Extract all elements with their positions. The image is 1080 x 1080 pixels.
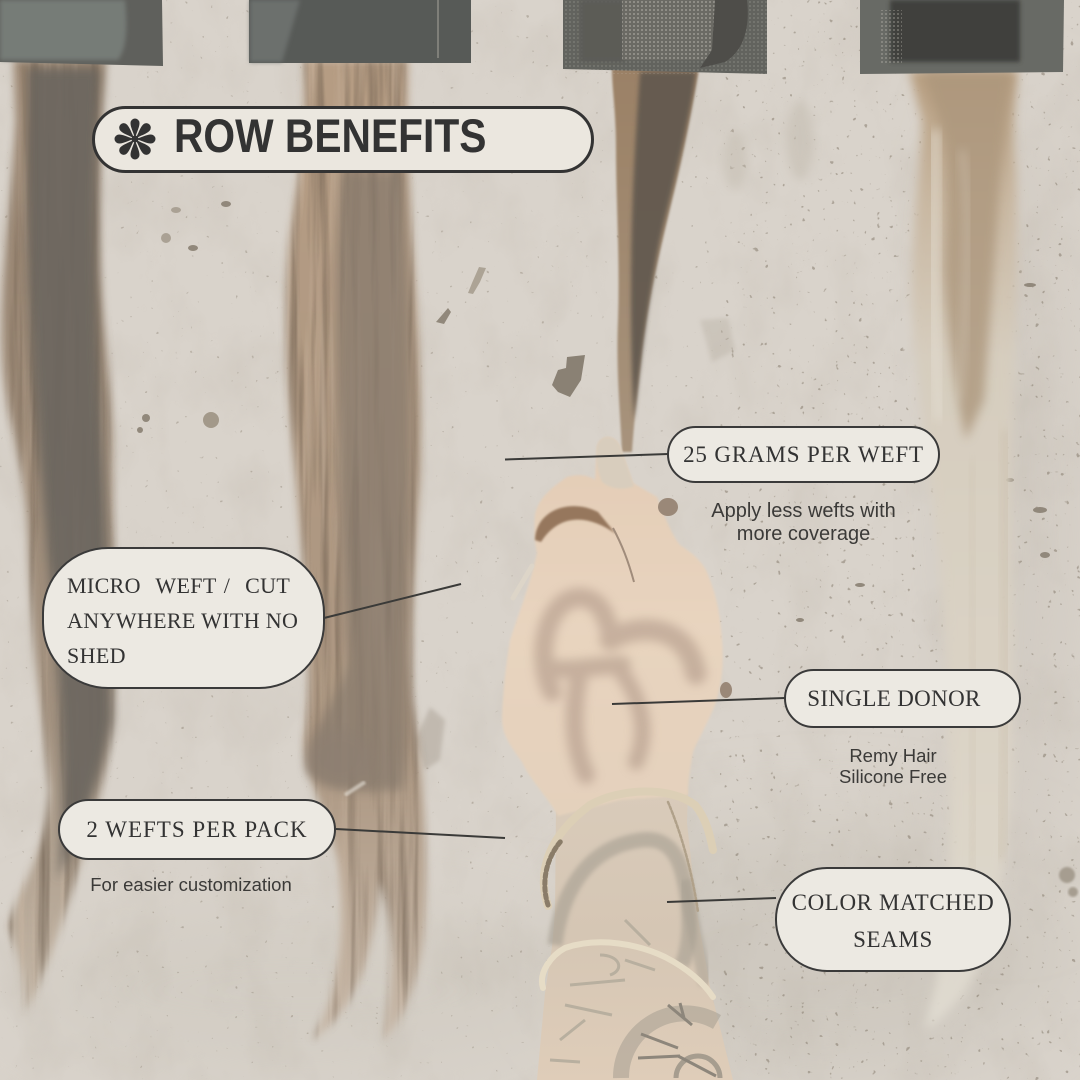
- heading: ROW BENEFITS: [174, 109, 486, 162]
- callout: micro weft: [42, 547, 325, 689]
- note: less wefts: Apply less wefts with: [711, 500, 896, 522]
- title pill: [92, 106, 594, 173]
- note: remy hair: [839, 745, 947, 787]
- note: less wefts: [711, 500, 896, 545]
- callout: 25 grams per weft: [667, 426, 940, 483]
- concrete pits: [137, 100, 1078, 897]
- callout: micro weft: ANYWHERE WITH NO: [67, 608, 298, 633]
- hand tattoo: [544, 598, 696, 775]
- callout: single donor: [784, 669, 1021, 728]
- forearm tattoo: [550, 840, 720, 1078]
- forearm: [537, 790, 733, 1080]
- raised hand and forearm: [502, 437, 733, 1080]
- hand: [502, 437, 723, 816]
- hair weft 3: held-up strand: [612, 68, 699, 452]
- other nails and ring: [658, 498, 678, 516]
- callout: color matched seams: COLOR MATCHED: [792, 890, 994, 915]
- bracelets: [542, 791, 713, 997]
- hair wrapped around finger: [535, 506, 616, 542]
- callout: single donor: SINGLE DONOR: [807, 686, 981, 711]
- icon: flower: [114, 118, 156, 160]
- callout: 2 wefts per pack: 2 WEFTS PER PACK: [86, 817, 308, 842]
- callout: color matched seams: SEAMS: [853, 927, 933, 952]
- note: easier customization: For easier customization: [90, 874, 292, 895]
- callout: 25 grams per weft: 25 GRAMS PER WEFT: [683, 442, 924, 467]
- note: less wefts: more coverage: [737, 523, 870, 545]
- note: remy hair: Silicone Free: [839, 766, 947, 787]
- hair weft 1: dark brown: [2, 60, 115, 1012]
- callout: color matched seams: [775, 867, 1011, 972]
- black tape strips: [0, 0, 1064, 74]
- note: remy hair: Remy Hair: [849, 745, 937, 766]
- callout: 2 wefts per pack: [58, 799, 336, 860]
- fingernail: [597, 437, 634, 489]
- callout: micro weft: MICRO WEFT / CUT: [67, 573, 290, 598]
- connector lines: [324, 454, 785, 902]
- hair weft 2: medium brown: [287, 60, 426, 1040]
- hair weft 4: blonde balayage: [909, 70, 1018, 1030]
- callout: micro weft: SHED: [67, 643, 126, 668]
